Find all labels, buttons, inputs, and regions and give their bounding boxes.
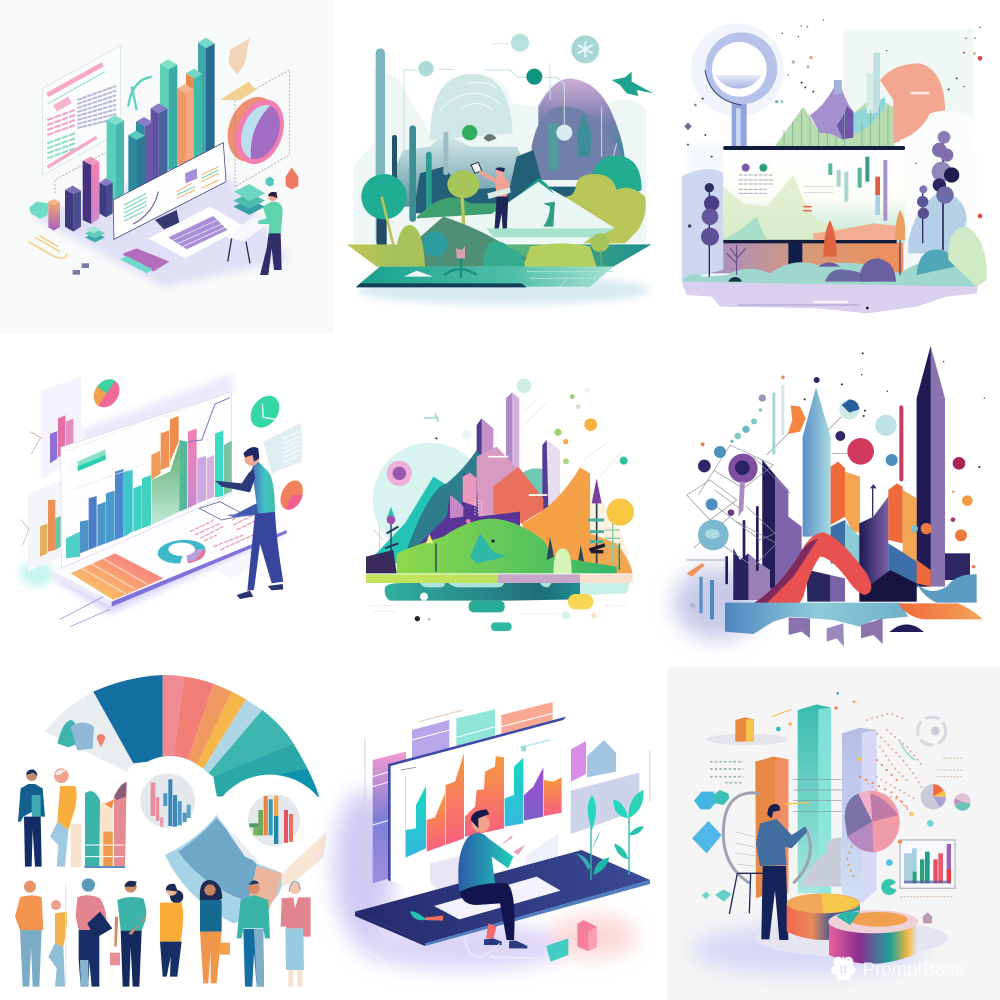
stripe ground bbox=[366, 574, 633, 583]
dashed guides bbox=[55, 70, 289, 193]
purple stepped towers bbox=[725, 460, 802, 600]
gauge wheel bbox=[918, 717, 946, 745]
panel: man at desk with area chart bbox=[333, 702, 650, 975]
gradient stripes panel bbox=[71, 553, 163, 600]
teal folder bbox=[546, 938, 568, 962]
orange hexagon bbox=[788, 405, 806, 434]
ground strip bbox=[347, 244, 652, 267]
woman blue top bbox=[200, 880, 230, 983]
towers bbox=[477, 392, 560, 522]
floor glow bbox=[690, 925, 923, 975]
bar columns bbox=[48, 38, 215, 232]
old man pink bbox=[281, 882, 311, 987]
left tree bbox=[701, 183, 719, 277]
grid ticks bbox=[784, 105, 888, 146]
keyboard bbox=[434, 877, 561, 919]
trees bbox=[373, 478, 620, 572]
tree bbox=[577, 113, 592, 157]
back card top bbox=[31, 377, 81, 480]
hill left bbox=[417, 217, 530, 267]
teal pill blocks bbox=[469, 594, 593, 631]
bent woman yellow bbox=[50, 768, 81, 867]
soft bluish shadow bbox=[673, 567, 760, 640]
small right tree bbox=[917, 185, 929, 243]
monitor bbox=[113, 143, 226, 239]
background card bbox=[667, 667, 1000, 1000]
back card lower bbox=[21, 482, 61, 572]
fan wedges bbox=[45, 675, 319, 797]
orange center tower bbox=[831, 462, 860, 533]
panel: abstract spires and circles bbox=[673, 346, 985, 647]
floor shadow bbox=[33, 157, 290, 287]
man in blue jacket bbox=[18, 769, 45, 867]
tablet bbox=[199, 502, 245, 520]
cylinder two bbox=[828, 910, 918, 964]
reflection band bbox=[385, 583, 580, 601]
dark slope bbox=[407, 450, 487, 550]
panel: isometric dashboard with standing man bbox=[20, 373, 308, 627]
magnifier halo bbox=[691, 23, 784, 117]
teal clouds bbox=[682, 259, 978, 287]
stacked green blocks bbox=[233, 184, 265, 215]
right tall tree bbox=[932, 131, 959, 250]
bird bbox=[612, 72, 653, 96]
folder bbox=[120, 248, 169, 273]
right bush blue bbox=[908, 190, 967, 253]
leaf shape bbox=[483, 134, 497, 142]
pie orange bbox=[89, 374, 125, 412]
pink cube bbox=[577, 920, 597, 951]
ground base bbox=[366, 550, 397, 573]
lines ground bbox=[60, 597, 110, 627]
colored under monitor bbox=[710, 240, 903, 273]
stool bbox=[729, 873, 763, 914]
scattered dots bbox=[684, 19, 982, 309]
teal mountain bbox=[367, 477, 445, 563]
back right trees bbox=[565, 156, 646, 243]
fog mid bbox=[387, 133, 537, 207]
right cards bbox=[571, 740, 639, 834]
path strip bbox=[487, 228, 615, 237]
orange column bbox=[755, 757, 788, 898]
plants bbox=[575, 790, 644, 880]
panel: analyst with columns and pie bbox=[667, 667, 1000, 1000]
bent figure bbox=[48, 883, 67, 987]
data sheet bbox=[43, 46, 121, 175]
connector lines bbox=[793, 779, 842, 811]
low hill right bbox=[523, 243, 597, 267]
pie smaller bbox=[954, 793, 971, 811]
orange wave bbox=[898, 603, 983, 619]
green mid bands bbox=[417, 197, 500, 218]
white mountain bbox=[450, 182, 615, 228]
pie green bbox=[245, 390, 286, 434]
dashboard base bbox=[53, 483, 287, 607]
right orange arc bbox=[590, 533, 633, 573]
panel: colorful mountains and towers bbox=[366, 378, 634, 631]
orange dots lines bbox=[735, 832, 760, 867]
fog back layer bbox=[353, 70, 647, 243]
left bush lavender bbox=[682, 169, 723, 280]
pale dome bbox=[430, 74, 513, 140]
soft shadow bbox=[357, 275, 650, 305]
back colored panels bbox=[365, 702, 650, 883]
bar chart card bbox=[900, 840, 955, 888]
loose orange scribble bbox=[229, 38, 249, 75]
lime tree bbox=[447, 170, 479, 230]
coral mountain bbox=[493, 467, 543, 523]
lavender column bbox=[842, 728, 877, 903]
platforms bbox=[488, 457, 547, 495]
teal pac bbox=[881, 879, 897, 895]
peach blob bbox=[880, 63, 945, 143]
top orange cube bbox=[706, 717, 787, 745]
floor lines bbox=[362, 937, 537, 975]
pie chart bbox=[845, 790, 900, 852]
back fog panel bbox=[843, 28, 973, 142]
desk bbox=[355, 850, 650, 946]
back fog right bbox=[900, 111, 973, 240]
lens ring bbox=[219, 90, 292, 171]
chart circle 1 bbox=[140, 773, 195, 828]
donut bbox=[157, 538, 207, 565]
yellow highlight bbox=[783, 803, 809, 804]
foreground shrubs bbox=[395, 225, 609, 278]
dark hill bbox=[532, 106, 623, 180]
panel: isometric bar charts with analyst bbox=[0, 0, 333, 333]
orange trees bbox=[823, 210, 905, 275]
keyboard desk bbox=[148, 207, 268, 263]
man pink with folder bbox=[76, 878, 112, 987]
white person backdrop bbox=[268, 888, 325, 945]
chart circle 2 bbox=[248, 794, 300, 846]
hanging reflections bbox=[789, 617, 924, 647]
monitor bbox=[723, 146, 905, 265]
magnifier bbox=[705, 32, 777, 147]
dark block bbox=[859, 497, 888, 602]
gray blob center bbox=[800, 838, 842, 887]
faint diagonal lines bbox=[520, 398, 623, 477]
small house shape bbox=[923, 912, 932, 923]
standing man bbox=[215, 447, 283, 599]
tiny diamonds bbox=[73, 263, 89, 275]
purple sun bbox=[387, 461, 412, 486]
dome arcs bbox=[440, 82, 500, 110]
yellow arrow lines bbox=[28, 236, 67, 258]
confetti bbox=[772, 692, 963, 897]
glass block bbox=[525, 833, 558, 883]
left small bars bbox=[687, 563, 714, 619]
circle tokens bbox=[418, 34, 599, 141]
dark mid columns bbox=[807, 570, 917, 602]
teal hexagon block bbox=[29, 202, 48, 219]
pie coral bbox=[276, 477, 308, 513]
man teal bbox=[110, 881, 147, 987]
faint horizontal lines bbox=[368, 606, 627, 613]
blue map fan bbox=[165, 815, 327, 923]
cylinder one bbox=[787, 893, 860, 940]
under desk tab bbox=[215, 552, 263, 578]
dark city shapes bbox=[413, 150, 577, 213]
round teal tree bbox=[361, 174, 407, 245]
blue wave base bbox=[725, 603, 908, 634]
woman yellow bbox=[160, 884, 183, 977]
confetti dots bbox=[415, 378, 634, 621]
pale sky circle bbox=[373, 443, 487, 557]
stacked block left bbox=[85, 226, 105, 242]
bare tree bbox=[727, 245, 746, 275]
pie small right bbox=[921, 784, 946, 809]
lattice lines bbox=[687, 417, 848, 567]
dot cluster bbox=[475, 500, 482, 515]
purple base bbox=[417, 473, 520, 550]
area chart green bbox=[775, 97, 894, 146]
man teal shirt tall bbox=[237, 880, 270, 987]
teal column bbox=[798, 704, 831, 893]
pillars bbox=[376, 48, 558, 245]
blue spire bbox=[803, 387, 831, 537]
hex shapes left bbox=[692, 790, 732, 902]
list card bbox=[263, 423, 302, 473]
watermark: PromptBase bbox=[863, 958, 965, 979]
panel: green landscape with person bbox=[347, 34, 653, 305]
orange right tower bbox=[888, 483, 917, 563]
analyst bbox=[756, 804, 807, 940]
green hill bbox=[397, 519, 617, 573]
small cubes bbox=[266, 168, 298, 189]
blob on gray wedge bbox=[57, 720, 105, 751]
watermark brain icon bbox=[831, 957, 856, 981]
white cutouts bbox=[123, 756, 333, 900]
monitor stand bbox=[430, 855, 467, 893]
bald man orange bbox=[15, 881, 43, 987]
dark spire bbox=[917, 346, 945, 587]
mauve mountain bbox=[538, 78, 625, 160]
arrow bbox=[870, 484, 877, 517]
pink center mountain bbox=[477, 447, 520, 517]
domes bbox=[728, 227, 987, 287]
black specks bbox=[804, 352, 985, 468]
ground band bbox=[682, 282, 978, 313]
base slab bbox=[356, 267, 613, 287]
circuit lines bbox=[404, 63, 617, 170]
analyst figure bbox=[258, 192, 283, 275]
text rows left bbox=[710, 762, 743, 783]
blue stepped bbox=[831, 520, 860, 563]
column and teal area bbox=[853, 97, 885, 133]
chart sketch bbox=[128, 77, 152, 110]
seated man bbox=[458, 809, 527, 948]
desk items bbox=[410, 911, 443, 921]
orange mountain bbox=[522, 467, 590, 563]
monitor bbox=[388, 717, 566, 886]
panel: magnifier and dashboard in landscape bbox=[682, 19, 987, 313]
text rows bbox=[190, 510, 257, 550]
magnifier loop bbox=[723, 793, 810, 883]
glow background bbox=[333, 790, 637, 970]
panel: people and fan chart bbox=[15, 675, 333, 987]
purple area bbox=[810, 80, 853, 139]
thin bars bbox=[772, 385, 903, 481]
base block right bbox=[945, 553, 970, 580]
right bg arc bbox=[590, 487, 633, 573]
palm bbox=[543, 202, 555, 227]
circles bbox=[690, 376, 975, 609]
person with tablet bbox=[471, 162, 511, 232]
column figures bbox=[84, 782, 127, 868]
soft shadow bbox=[50, 527, 287, 613]
red ribbon bbox=[753, 532, 871, 608]
main screen bbox=[61, 392, 232, 568]
